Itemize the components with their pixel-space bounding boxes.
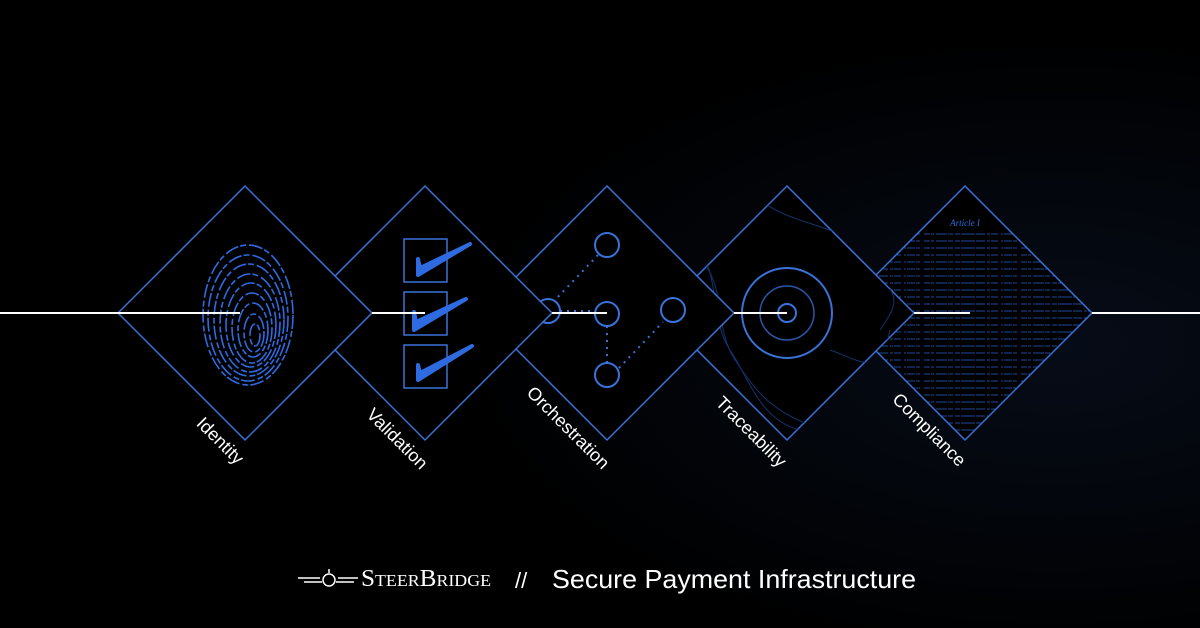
connector lines [0,312,1200,314]
labels: Compliance [889,389,970,470]
footer: Secure Payment Infrastructure [552,564,916,594]
diamond: identity [118,186,372,440]
diamond: orchestration [480,186,734,440]
contour texture [706,205,894,430]
diamond: compliance [876,185,1092,441]
labels: Validation [363,404,432,473]
document texture [878,220,1090,430]
icon: target [742,268,832,358]
diamond: traceability [697,185,914,441]
icon: checkboxes [404,239,472,388]
diamond: validation [298,186,552,440]
footer [298,564,916,594]
icon: network nodes [536,233,685,387]
labels: Orchestration [523,382,614,473]
labels: Identity [193,413,248,468]
icon: fingerprint [203,245,293,385]
labels [193,382,970,473]
labels: Traceability [712,392,791,471]
brand name: SteerBridge [361,566,491,592]
footer: // [515,568,528,593]
logo icon [298,569,358,586]
document texture: Article I [949,218,981,228]
